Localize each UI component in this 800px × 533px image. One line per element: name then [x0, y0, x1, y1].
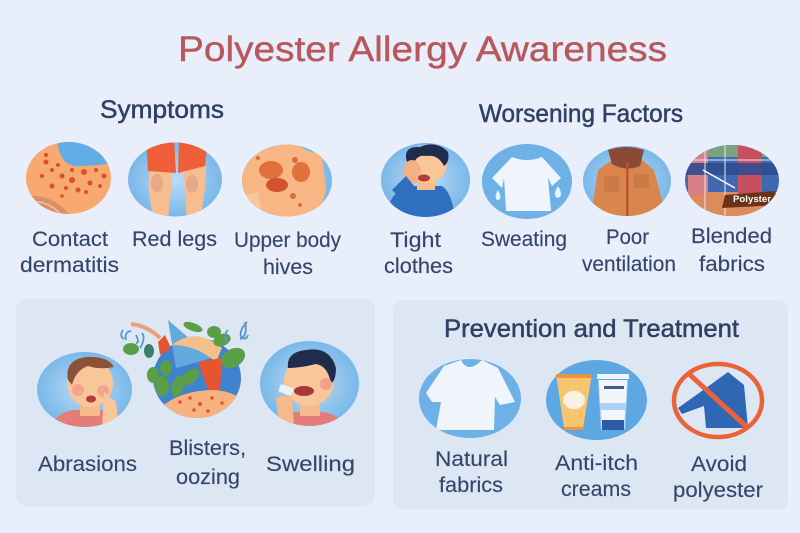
panel: reactions: [16, 299, 375, 506]
label: tight clothes: clothes: [384, 254, 453, 278]
label: upper body hives: Upper body: [234, 228, 341, 252]
icon: natural fabrics: [419, 359, 521, 438]
label: natural fabrics: Natural: [435, 447, 508, 471]
label: abrasions: Abrasions: [38, 452, 137, 476]
icon: poor ventilation: [583, 146, 671, 222]
label: polyester tag: Polyster: [733, 194, 771, 205]
icon: anti-itch creams: [546, 360, 647, 440]
icon: blended fabrics: [685, 145, 779, 217]
label: blended fabrics: Blended: [691, 224, 772, 248]
icon: avoid polyester: [674, 364, 762, 437]
label: blisters, oozing: oozing: [176, 465, 240, 489]
label: contact dermatitis: Contact: [32, 227, 108, 251]
label: anti-itch creams: creams: [561, 477, 631, 501]
icon: contact dermatitis: [26, 142, 111, 214]
panel: prevention and treatment: [393, 300, 788, 510]
label: tight clothes: Tight: [390, 228, 441, 252]
heading: prevention and treatment: Prevention and Treatment: [444, 315, 739, 343]
label: avoid polyester: polyester: [673, 478, 763, 502]
icon: sweating: [482, 144, 572, 219]
icon: abrasions: [37, 352, 132, 430]
label: blisters, oozing: Blisters,: [169, 436, 246, 460]
label: avoid polyester: Avoid: [691, 452, 747, 476]
icon: swelling: [260, 341, 359, 430]
icon: red legs: [128, 138, 222, 220]
icon: blisters and oozing: [121, 320, 249, 420]
heading: worsening factors: Worsening Factors: [479, 100, 683, 128]
label: natural fabrics: fabrics: [439, 473, 503, 497]
title: Polyester Allergy Awareness: [178, 30, 667, 69]
label: red legs: Red legs: [132, 227, 217, 251]
label: anti-itch creams: Anti-itch: [555, 451, 638, 475]
label: upper body hives: hives: [263, 255, 313, 279]
label: sweating: Sweating: [481, 227, 567, 251]
label: poor ventilation: ventilation: [582, 252, 676, 276]
heading: symptoms: Symptoms: [100, 96, 224, 124]
label: contact dermatitis: dermatitis: [20, 253, 119, 277]
label: blended fabrics: fabrics: [699, 252, 765, 276]
label: poor ventilation: Poor: [606, 225, 649, 249]
label: swelling: Swelling: [266, 452, 355, 476]
icon: tight clothes: [381, 143, 470, 222]
icon: upper body hives: [240, 144, 332, 220]
